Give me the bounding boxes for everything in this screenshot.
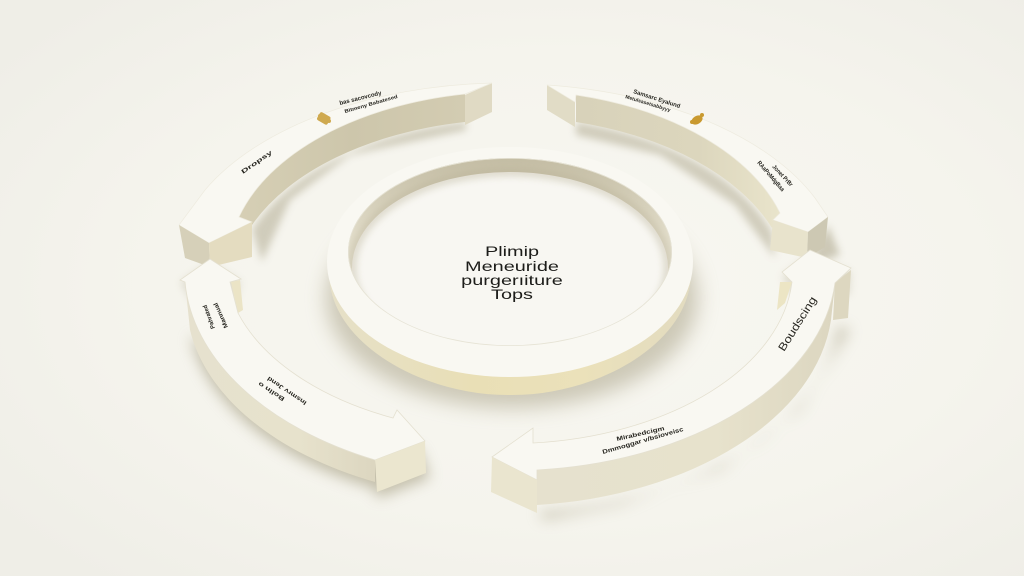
top surface — [180, 259, 425, 460]
arrowhead side face — [807, 217, 828, 258]
shadows — [180, 122, 851, 520]
label: top: Samsarc Eyalund — [632, 89, 681, 110]
label: top: bas sacovcody — [339, 91, 383, 107]
arrowhead front face — [491, 457, 537, 513]
label: top — [339, 91, 398, 115]
arrowhead right face — [209, 222, 252, 267]
outer wall — [537, 283, 835, 505]
label: bottom — [602, 426, 685, 456]
ring top surface — [327, 147, 693, 377]
center text: Tops — [491, 286, 533, 302]
icon: gold emblem — [690, 113, 704, 126]
ring floor — [348, 158, 672, 364]
center text: purgerıiture — [461, 272, 563, 288]
label: right: Jonet PrBr — [771, 164, 794, 189]
arrow: bottom right — [491, 250, 851, 513]
label: bottom: Dmmoggar v/bsioveisc — [602, 427, 685, 456]
label: left: Dropsy — [241, 149, 275, 176]
label: right: Boudscing — [776, 295, 819, 354]
top surface — [492, 250, 851, 480]
ring opening inner wall — [348, 158, 672, 346]
label: lower: Bolln o — [257, 380, 286, 401]
center text — [461, 243, 563, 302]
label: upper: Mannual — [213, 301, 230, 329]
tail end face — [465, 83, 492, 125]
label: bottom: Mirabedcigm — [616, 426, 665, 443]
tail end face — [547, 85, 575, 127]
label: lower: Insmrv Jend — [266, 374, 308, 405]
icon: gold emblem — [316, 112, 331, 125]
arrow: bottom left — [180, 259, 426, 492]
label: upper — [203, 301, 230, 329]
arrowhead front face — [375, 441, 426, 492]
ring outer wall — [327, 262, 693, 395]
side face of head — [833, 270, 851, 320]
small inner wall — [231, 280, 243, 313]
inner wall — [239, 94, 465, 225]
center text: Plimip — [485, 243, 539, 259]
outer wall — [185, 282, 375, 482]
inner wall — [576, 95, 780, 228]
label: top: Metulsasetsabbyyy — [624, 94, 671, 114]
arrow: top right — [547, 85, 828, 258]
small inner wall — [777, 282, 792, 310]
label: right: RAaPoMdgBaa — [755, 160, 785, 193]
arrowhead left face — [179, 225, 210, 267]
top surface — [179, 83, 492, 243]
label: top: Bitmeny Babatesed — [344, 94, 398, 115]
cycle diagram — [178, 82, 853, 526]
arrow: top left — [179, 83, 492, 267]
label: upper: Pahrated — [203, 304, 217, 329]
arrowhead front face — [770, 220, 808, 258]
center text: Meneuride — [465, 258, 559, 274]
center ring — [327, 147, 693, 395]
label: lower — [257, 374, 308, 405]
top surface — [547, 85, 828, 232]
